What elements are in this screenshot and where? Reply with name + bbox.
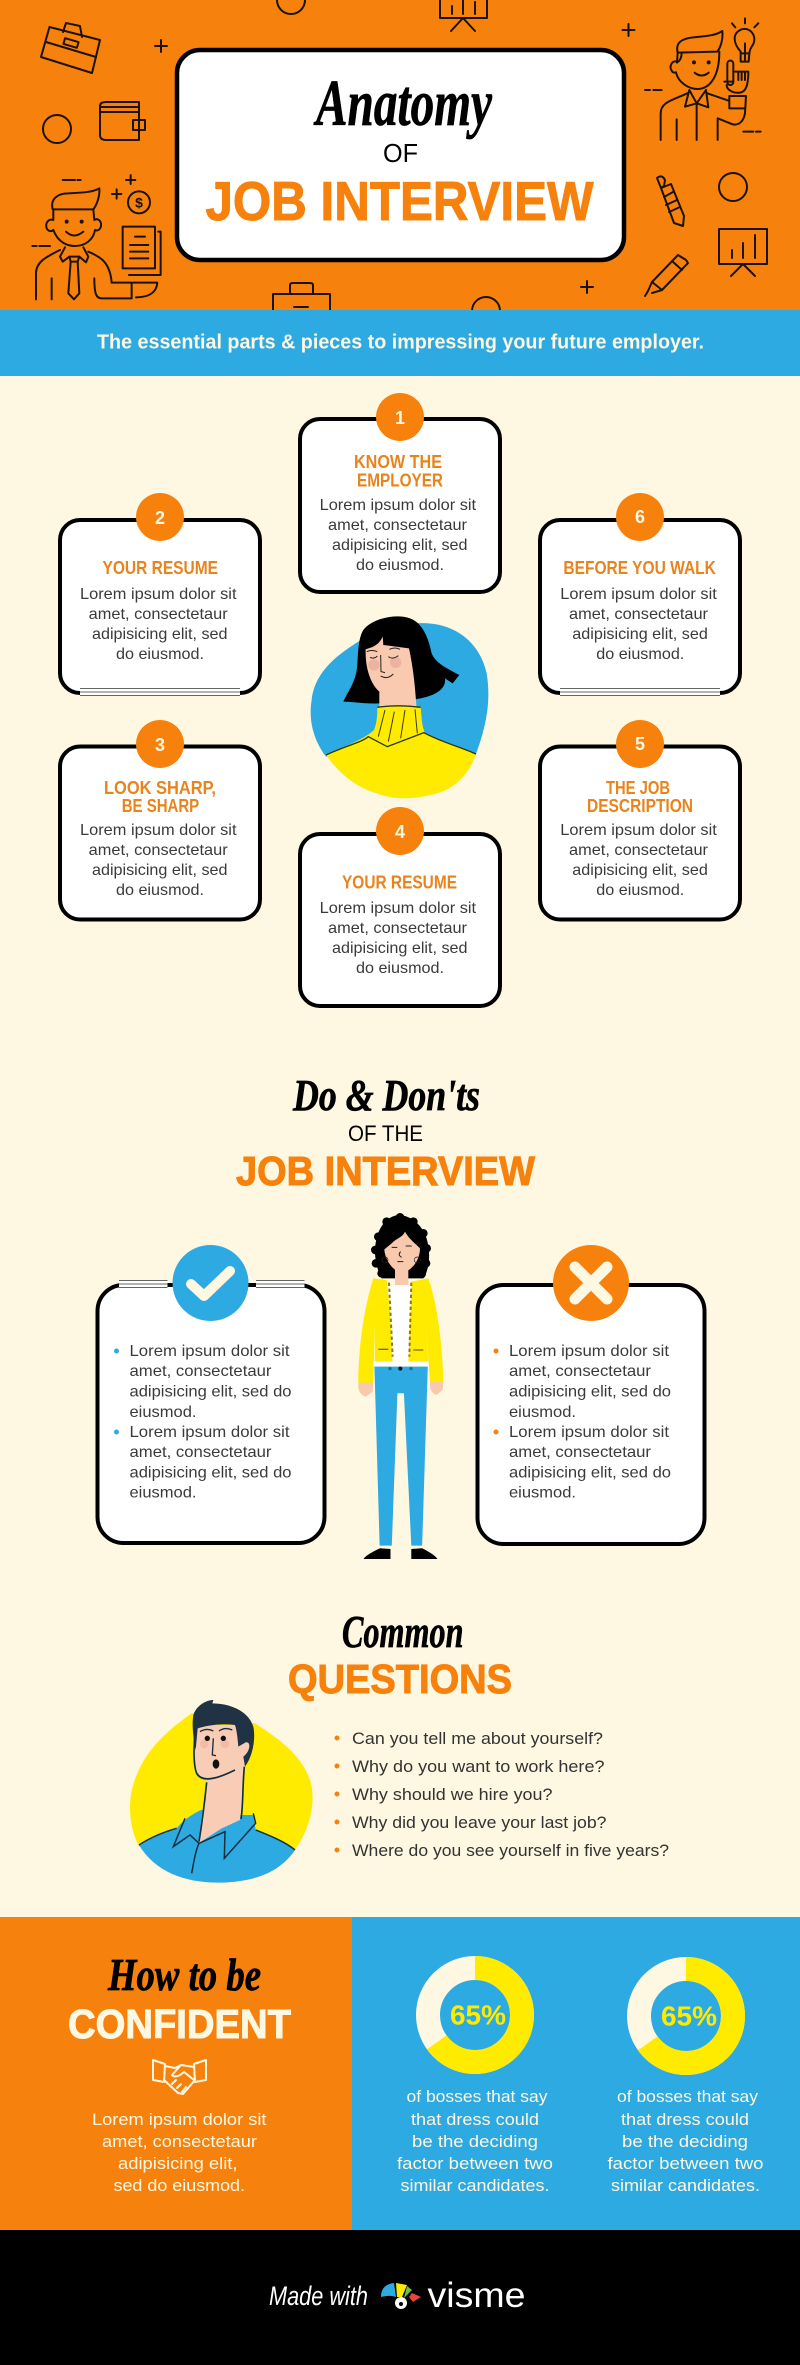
card 6 body: Lorem ipsum dolor sit	[560, 586, 717, 603]
card 4 body	[320, 900, 477, 977]
panel: card 5 the job description	[540, 720, 740, 920]
card 1 body: Lorem ipsum dolor sit	[320, 497, 477, 514]
card 5 body: adipisicing elit, sed	[572, 862, 708, 879]
card 2 body: amet, consectetaur	[89, 606, 228, 623]
title: OF: OF	[383, 138, 418, 168]
logo mark	[381, 2283, 421, 2309]
card 6 body	[560, 586, 717, 663]
donut chart 2	[639, 1969, 733, 2063]
badge 1: 1	[395, 408, 405, 428]
do list	[114, 1343, 292, 1502]
question list: Where do you see yourself in five years?	[352, 1841, 669, 1860]
card 3 body: do eiusmod.	[116, 882, 204, 899]
do list: Lorem ipsum dolor sit	[130, 1343, 290, 1360]
illustration: standing woman	[358, 1213, 443, 1559]
icon: man with documents: $	[135, 194, 143, 210]
confident body: sed do eiusmod.	[114, 2176, 245, 2195]
card 2 body: adipisicing elit, sed	[92, 626, 228, 643]
card 1 heading: KNOW THE	[354, 452, 442, 472]
question list: Why did you leave your last job?	[352, 1813, 606, 1832]
stat text 2: factor between two	[608, 2154, 764, 2173]
don't list: Lorem ipsum dolor sit	[509, 1343, 670, 1360]
don't list: Lorem ipsum dolor sit	[509, 1424, 670, 1441]
badge 6	[616, 493, 664, 541]
panel: card 3 look sharp	[60, 720, 260, 920]
card 4 body: adipisicing elit, sed	[332, 940, 468, 957]
card 3 body	[80, 822, 237, 899]
card 2 body: do eiusmod.	[116, 646, 204, 663]
card 4 heading: YOUR RESUME	[342, 872, 457, 892]
title: Anatomy: Anatomy	[313, 67, 493, 140]
panel: card 1 know the employer	[300, 393, 500, 592]
card 5 body	[560, 822, 717, 899]
don't list	[494, 1343, 671, 1502]
card 3 body: adipisicing elit, sed	[92, 862, 228, 879]
don't list: adipisicing elit, sed do	[509, 1464, 671, 1482]
icon: presentation board right	[719, 229, 767, 276]
confident body: amet, consectetaur	[102, 2132, 257, 2151]
icon: man with idea	[645, 18, 761, 140]
icon: tilted briefcase	[41, 23, 100, 73]
job interview: JOB INTERVIEW	[236, 1148, 535, 1194]
donut chart 1	[428, 1968, 522, 2062]
script heading: How to be	[107, 1949, 261, 2000]
card 5 body: amet, consectetaur	[569, 842, 709, 859]
questions: QUESTIONS	[288, 1656, 512, 1702]
card 6 heading: BEFORE YOU WALK	[563, 558, 716, 578]
panel: title box	[177, 50, 624, 260]
badge 2: 2	[155, 508, 165, 528]
of the: OF THE	[348, 1121, 423, 1146]
panel: footer	[0, 2230, 800, 2365]
card 3 heading: LOOK SHARP,	[104, 778, 216, 798]
don't list: adipisicing elit, sed do	[509, 1384, 671, 1400]
visme wordmark: visme	[428, 2276, 526, 2315]
badge 5: 5	[635, 734, 645, 754]
card 5 heading	[587, 778, 693, 816]
don't list: eiusmod.	[509, 1404, 576, 1421]
icon: check badge	[172, 1245, 248, 1321]
heading: do and don'ts	[236, 1071, 535, 1194]
title: JOB INTERVIEW: JOB INTERVIEW	[206, 170, 594, 232]
card 1 body: do eiusmod.	[356, 557, 444, 574]
badge 4	[376, 807, 424, 855]
icon: cross badge	[553, 1245, 629, 1321]
question list	[334, 1729, 669, 1860]
stat text 2: of bosses that say	[617, 2087, 759, 2106]
don't list: amet, consectetaur	[509, 1444, 652, 1461]
card 3 heading	[104, 778, 216, 816]
stat text 2: similar candidates.	[611, 2176, 760, 2195]
do list: amet, consectetaur	[130, 1363, 272, 1380]
made with: Made with	[269, 2281, 368, 2311]
icon: presentation board top	[440, 0, 487, 31]
do list: amet, consectetaur	[130, 1444, 272, 1461]
question list: Can you tell me about yourself?	[352, 1729, 603, 1748]
panel: statistics	[352, 1917, 800, 2230]
card 3 heading: BE SHARP	[122, 796, 199, 816]
card 1 body: amet, consectetaur	[328, 517, 468, 534]
card 6 bottom bar	[560, 688, 720, 696]
card 5 body: Lorem ipsum dolor sit	[560, 822, 717, 839]
card 1 heading	[354, 452, 443, 490]
question list: Why should we hire you?	[352, 1785, 552, 1804]
badge 6: 6	[635, 507, 645, 527]
icon: plus signs	[155, 24, 634, 293]
panel: orange header	[0, 0, 800, 325]
icon: decorative circles	[43, 0, 747, 325]
card 5 body: do eiusmod.	[596, 882, 684, 899]
card 5 heading: DESCRIPTION	[587, 796, 693, 816]
icon: handshake	[153, 2060, 206, 2094]
stat text 1: factor between two	[397, 2154, 553, 2173]
card 6 body: do eiusmod.	[596, 646, 684, 663]
heading: common questions	[288, 1606, 512, 1702]
do list: eiusmod.	[130, 1404, 196, 1421]
confident body: adipisicing elit,	[118, 2154, 238, 2173]
question list: Why do you want to work here?	[352, 1757, 604, 1776]
badge 3	[136, 720, 184, 768]
panel: how to be confident	[0, 1917, 352, 2230]
stat text 1: similar candidates.	[400, 2176, 550, 2195]
stat text 1: that dress could	[411, 2110, 539, 2129]
badge 2	[136, 493, 184, 541]
card 1 body	[320, 497, 477, 574]
card 5 heading: THE JOB	[606, 778, 670, 798]
confident heading: CONFIDENT	[68, 2001, 291, 2047]
script line: Do & Don'ts	[292, 1071, 480, 1120]
card 3 body: Lorem ipsum dolor sit	[80, 822, 237, 839]
stat text 2	[608, 2087, 764, 2195]
panel: card 4 your resume	[300, 807, 500, 1006]
script line: Common	[342, 1606, 464, 1657]
illustration: surprised man	[130, 1700, 313, 1883]
badge 5	[616, 720, 664, 768]
icon: pen	[645, 255, 688, 296]
icon: man with documents	[32, 175, 161, 299]
card 1 body: adipisicing elit, sed	[332, 537, 468, 554]
icon: necktie	[657, 176, 684, 226]
stat text 2: that dress could	[621, 2110, 749, 2129]
card 3 body: amet, consectetaur	[89, 842, 228, 859]
do list: adipisicing elit, sed do	[130, 1384, 292, 1400]
confident body: Lorem ipsum dolor sit	[92, 2110, 267, 2129]
badge 3: 3	[155, 735, 165, 755]
donut chart 2: 65%	[661, 2000, 717, 2032]
icon: briefcase bottom	[273, 283, 330, 310]
confident body	[92, 2110, 267, 2195]
card 2 body	[80, 586, 237, 663]
stat text 1: of bosses that say	[406, 2087, 548, 2106]
subtitle: The essential parts & pieces to impressing your future employer.	[97, 332, 704, 354]
donut chart 1: 65%	[450, 2000, 506, 2030]
card 4 body: Lorem ipsum dolor sit	[320, 900, 477, 917]
decorative top bars	[119, 1280, 304, 1288]
card 4 body: do eiusmod.	[356, 960, 444, 977]
card 6 body: adipisicing elit, sed	[572, 626, 708, 643]
do list: adipisicing elit, sed do	[130, 1464, 292, 1482]
do list: Lorem ipsum dolor sit	[130, 1424, 290, 1441]
do list: eiusmod.	[130, 1484, 196, 1502]
card 2 body: Lorem ipsum dolor sit	[80, 586, 237, 603]
don't list: amet, consectetaur	[509, 1363, 652, 1380]
panel: card 2 your resume	[60, 493, 260, 696]
badge 4: 4	[395, 822, 405, 842]
panel: do card	[98, 1245, 324, 1543]
card 1 heading: EMPLOYER	[357, 470, 443, 490]
card 2 heading: YOUR RESUME	[102, 558, 218, 578]
panel: blue subtitle band	[0, 310, 800, 376]
card 2 bottom bar	[80, 688, 240, 696]
don't list: eiusmod.	[509, 1484, 576, 1502]
badge 1	[376, 393, 424, 441]
stat text 2: be the deciding	[622, 2132, 748, 2151]
panel: card 6 before you walk	[540, 493, 740, 696]
illustration: woman portrait	[311, 616, 488, 798]
card 4 body: amet, consectetaur	[328, 920, 468, 937]
panel: don't card	[478, 1245, 704, 1544]
card 6 body: amet, consectetaur	[569, 606, 709, 623]
icon: wallet	[100, 102, 145, 140]
stat text 1: be the deciding	[412, 2132, 538, 2151]
stat text 1	[397, 2087, 553, 2195]
